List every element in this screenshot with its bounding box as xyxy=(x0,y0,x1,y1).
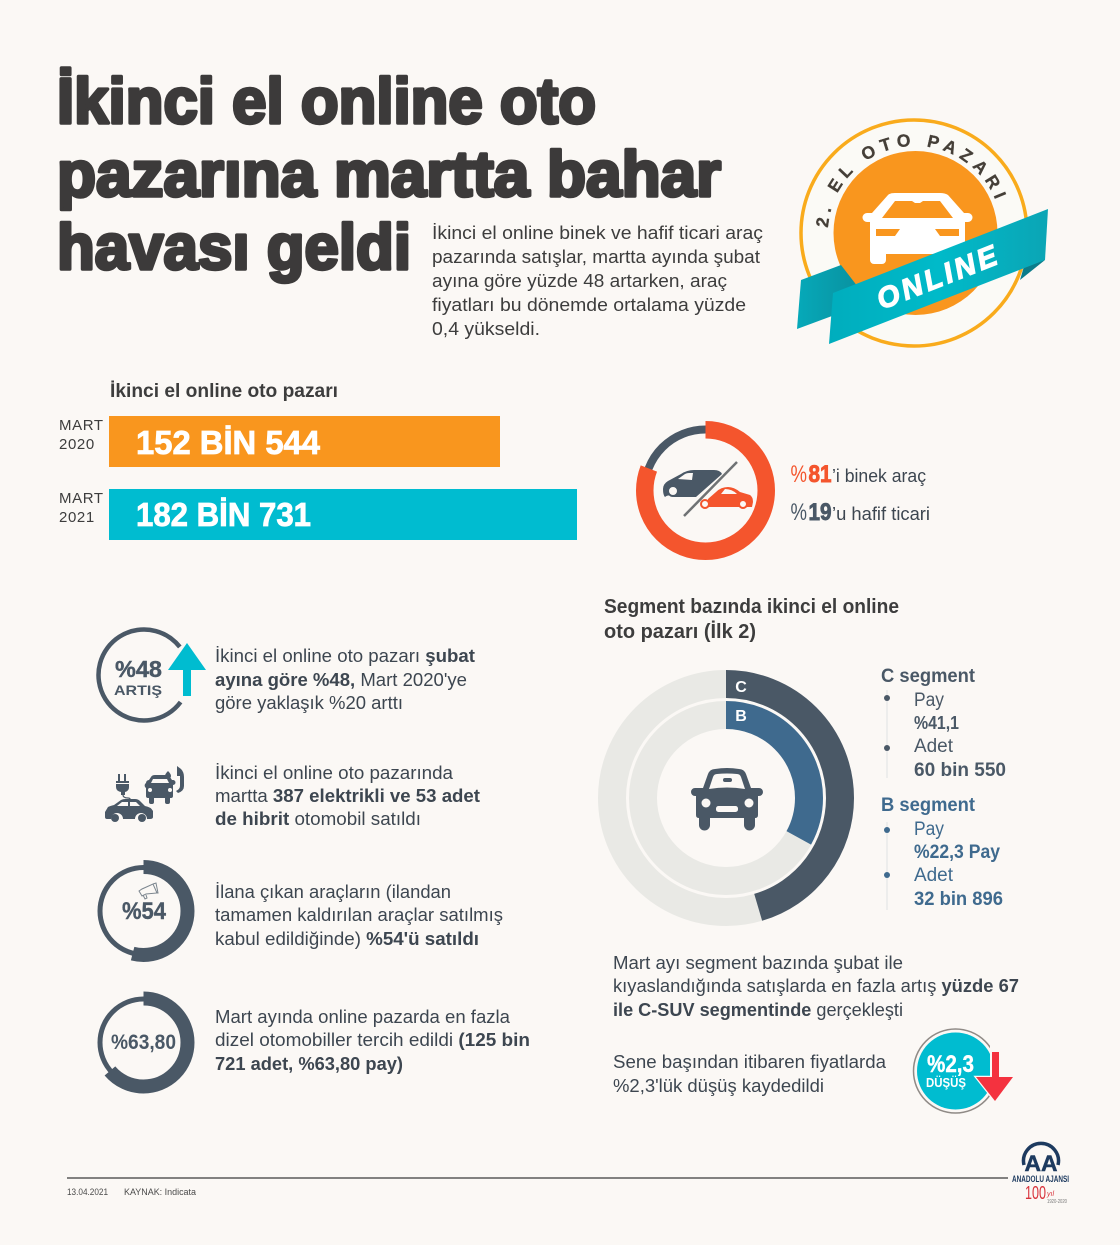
badge: 2.3 percent fall: DÜŞÜŞ xyxy=(926,1075,966,1090)
heading: online market: İkinci el online oto pazarı xyxy=(110,381,338,402)
logo: Anadolu Ajansi: 100 xyxy=(1025,1183,1046,1203)
legend: 81 percent: 81 xyxy=(808,461,832,488)
legend: C segment xyxy=(881,666,1006,781)
title: İkinci el online oto xyxy=(57,65,596,137)
intro text block: ayına göre yüzde 48 artarken, araç xyxy=(432,271,727,291)
text: 54 percent xyxy=(215,882,503,949)
intro text block: 0,4 yükseldi. xyxy=(432,319,540,339)
legend: B segment: Pay xyxy=(914,819,944,840)
icon: electric and hybrid cars xyxy=(105,766,184,822)
legend: B segment: B segment xyxy=(881,795,976,816)
bar: March 2020: MART xyxy=(59,417,104,434)
radial chart: segments: B xyxy=(735,708,747,725)
text: price fall xyxy=(613,1052,887,1096)
text: diesel: dizel otomobiller tercih edildi (125 bin xyxy=(215,1030,530,1050)
icon: red car xyxy=(706,487,753,507)
text: diesel: 721 adet, %63,80 pay) xyxy=(215,1054,403,1074)
logo: Anadolu Ajansi xyxy=(1012,1143,1069,1205)
legend: 19 percent: ’u hafif ticari xyxy=(832,504,930,524)
front of ribbon xyxy=(829,209,1048,344)
text: C-SUV: ile C-SUV segmentinde gerçekleşti xyxy=(613,1000,903,1020)
logo: Anadolu Ajansi: AA xyxy=(1024,1151,1058,1176)
legend: 19 percent: 19 xyxy=(808,499,832,526)
legend: 81 percent: ’i binek araç xyxy=(832,466,926,486)
badge: 2.3 percent fall: %2,3 xyxy=(927,1051,974,1078)
item: 54 percent sold: %54 xyxy=(122,898,167,925)
divider slash xyxy=(684,462,737,516)
text: electric and hybrid: martta 387 elektrikli ve 53 adet xyxy=(215,786,480,806)
item: 63.80 percent diesel: %63,80 xyxy=(111,1031,176,1054)
title: havası geldi xyxy=(57,211,411,283)
legend: B segment: 32 bin 896 xyxy=(914,889,1003,910)
bar: March 2021 xyxy=(59,489,577,540)
badge: 2. el oto pazari online xyxy=(797,118,1048,348)
text: C-SUV: Mart ayı segment bazında şubat ile xyxy=(613,953,903,973)
source xyxy=(67,1187,196,1197)
item: 54 percent sold xyxy=(100,867,188,955)
icon: badge car xyxy=(862,193,972,264)
source: KAYNAK: Indicata xyxy=(124,1187,196,1197)
source: 13.04.2021 xyxy=(67,1187,108,1197)
ribbon fold xyxy=(1020,260,1045,280)
icon: up arrow xyxy=(168,643,206,696)
back of ribbon xyxy=(797,265,868,329)
legend: C segment: C segment xyxy=(881,666,976,687)
legend: 19 percent xyxy=(790,499,930,526)
text: 54 percent: tamamen kaldırılan araçlar satılmış xyxy=(215,905,503,925)
badge: 2.3 percent fall xyxy=(914,1029,1013,1113)
item: 63.80 percent diesel xyxy=(100,998,188,1086)
text: C-SUV: kıyaslandığında satışlarda en fazla artış yüzde 67 xyxy=(613,976,1019,996)
legend: B segment xyxy=(881,795,1003,910)
text: 48 percent: İkinci el online oto pazarı şubat xyxy=(215,646,475,666)
logo: Anadolu Ajansi: ANADOLU AJANSI xyxy=(1012,1174,1069,1185)
bar: March 2020: 2020 xyxy=(59,436,95,453)
text: electric and hybrid: de hibrit otomobil satıldı xyxy=(215,809,421,829)
icon: car xyxy=(691,768,763,830)
bar: March 2021: MART xyxy=(59,490,104,507)
item: 48 percent increase: ARTIŞ xyxy=(114,682,162,698)
icon: down arrow xyxy=(976,1052,1013,1101)
text: electric and hybrid: İkinci el online oto pazarında xyxy=(215,763,454,783)
text: 48 percent: ayına göre %48, Mart 2020'ye xyxy=(215,670,467,690)
heading: segment xyxy=(604,596,899,643)
ribbon label: ONLINE xyxy=(872,239,1005,316)
text: 54 percent: İlana çıkan araçların (ilandan xyxy=(215,882,451,902)
text: diesel: Mart ayında online pazarda en fazla xyxy=(215,1007,511,1027)
text: 54 percent: kabul edildiğinde) %54'ü satıldı xyxy=(215,929,479,949)
title xyxy=(57,65,721,283)
donut chart: vehicle type xyxy=(644,430,766,552)
legend: C segment: Adet xyxy=(914,736,954,757)
legend: 81 percent xyxy=(790,461,926,488)
bar: March 2021: 182 BİN 731 xyxy=(136,496,311,533)
legend: 19 percent: % xyxy=(790,499,807,526)
badge curved text: 2. EL OTO PAZARI xyxy=(816,134,1006,228)
text: electric and hybrid xyxy=(215,763,480,829)
logo: Anadolu Ajansi: yıl xyxy=(1046,1191,1054,1198)
logo: Anadolu Ajansi: 1920-2020 xyxy=(1047,1199,1067,1205)
intro text block: İkinci el online binek ve hafif ticari araç xyxy=(432,223,763,243)
bar: March 2020 xyxy=(59,416,500,467)
legend: C segment: 60 bin 550 xyxy=(914,760,1006,781)
bar: March 2021: 2021 xyxy=(59,509,95,526)
bar: March 2020: 152 BİN 544 xyxy=(136,424,321,461)
icon: van xyxy=(663,470,722,497)
legend: C segment: %41,1 xyxy=(914,713,959,733)
text: 48 percent: göre yaklaşık %20 arttı xyxy=(215,693,403,713)
icon: megaphone xyxy=(139,883,158,899)
legend: B segment: Adet xyxy=(914,865,954,886)
heading: segment: Segment bazında ikinci el online xyxy=(604,596,899,618)
heading: segment: oto pazarı (İlk 2) xyxy=(604,620,756,643)
text: price fall: %2,3'lük düşüş kaydedildi xyxy=(613,1076,824,1096)
radial chart: segments: C xyxy=(735,679,747,696)
legend: 81 percent: % xyxy=(790,461,807,488)
item: 48 percent increase xyxy=(80,611,208,739)
title: pazarına martta bahar xyxy=(57,138,721,210)
text: 48 percent xyxy=(215,646,475,713)
footer line xyxy=(67,1177,1008,1179)
intro text block: pazarında satışlar, martta ayında şubat xyxy=(432,247,760,267)
text: C-SUV xyxy=(613,953,1019,1020)
item: 48 percent increase: %48 xyxy=(115,656,162,682)
intro text block xyxy=(432,223,763,339)
text: diesel xyxy=(215,1007,530,1074)
legend: C segment: Pay xyxy=(914,690,944,711)
intro text block: fiyatları bu dönemde ortalama yüzde xyxy=(432,295,746,315)
text: price fall: Sene başından itibaren fiyatlarda xyxy=(613,1052,887,1072)
legend: B segment: %22,3 Pay xyxy=(914,842,1000,863)
radial chart: segments xyxy=(612,679,840,912)
